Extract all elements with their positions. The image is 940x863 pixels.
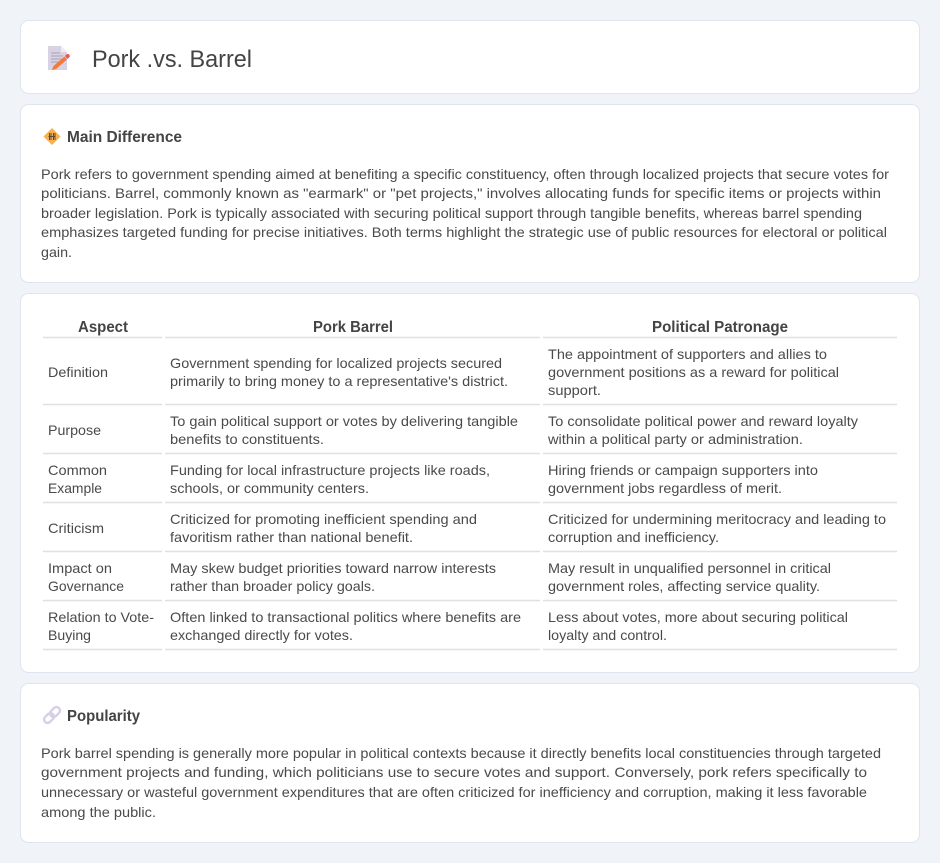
table row: definition: The appointment of supporters and allies to bbox=[548, 346, 827, 362]
table row: common example: Hiring friends or campaign supporters into bbox=[548, 462, 818, 478]
table row: criticism bbox=[48, 511, 886, 545]
text block: main difference bbox=[41, 166, 889, 260]
table row: purpose bbox=[48, 413, 858, 447]
table row: common example bbox=[48, 462, 818, 496]
table row: relation to vote-buying: Buying bbox=[48, 627, 91, 643]
table row: definition: primarily to bring money to a representative's district. bbox=[170, 373, 508, 389]
table row: purpose: Purpose bbox=[48, 422, 101, 438]
text block: popularity: unnecessary or wasteful government expenditures that are often criticized for inefficiency and corruption, making it less favorable bbox=[41, 784, 867, 800]
text block: popularity: Pork barrel spending is generally more popular in political contexts because it directly benefits local constituencies through targeted bbox=[41, 745, 881, 761]
table header row bbox=[78, 319, 788, 336]
heading: main difference: Main Difference bbox=[67, 129, 182, 146]
table row: definition: support. bbox=[548, 382, 601, 398]
heading: popularity: Popularity bbox=[67, 708, 140, 725]
table row: common example: Funding for local infrastructure projects like roads, bbox=[170, 462, 490, 478]
panel: main difference bbox=[20, 104, 920, 282]
table row: criticism: Criticized for promoting inefficient spending and bbox=[170, 511, 477, 527]
table row: definition: Definition bbox=[48, 364, 108, 380]
table row: relation to vote-buying: Often linked to transactional politics where benefits are bbox=[170, 609, 521, 625]
table row: common example: Example bbox=[48, 480, 102, 496]
table row: purpose: benefits to constituents. bbox=[170, 431, 324, 447]
table header row: Pork Barrel bbox=[313, 319, 393, 336]
title: Pork .vs. Barrel bbox=[92, 46, 252, 73]
text block: main difference: emphasizes targeted funding for precise initiatives. Both terms highlight the strategic use of public resources for electoral or political bbox=[41, 224, 887, 240]
table row: relation to vote-buying: Relation to Vote- bbox=[48, 609, 154, 625]
table row: criticism: corruption and inefficiency. bbox=[548, 529, 719, 545]
table row: relation to vote-buying: Less about votes, more about securing political bbox=[548, 609, 848, 625]
table row: impact on governance: May result in unqualified personnel in critical bbox=[548, 560, 831, 576]
table row: impact on governance: government roles, affecting service quality. bbox=[548, 578, 820, 594]
table row: common example: government jobs regardless of merit. bbox=[548, 480, 782, 496]
table row: relation to vote-buying: exchanged directly for votes. bbox=[170, 627, 353, 643]
panel: popularity bbox=[20, 684, 920, 842]
text block: popularity: among the public. bbox=[41, 804, 156, 820]
table row: criticism: Criticism bbox=[48, 520, 104, 536]
table row: common example: schools, or community centers. bbox=[170, 480, 369, 496]
table row: definition: government positions as a reward for political bbox=[548, 364, 839, 380]
text block: main difference: gain. bbox=[41, 244, 72, 260]
table row: impact on governance: Governance bbox=[48, 578, 124, 594]
table row: criticism: favoritism rather than national benefit. bbox=[170, 529, 413, 545]
table row: common example: Common bbox=[48, 462, 107, 478]
table row: purpose: within a political party or administration. bbox=[547, 431, 803, 447]
table row: relation to vote-buying bbox=[48, 609, 848, 643]
text block: main difference: Pork refers to government spending aimed at benefiting a specific constituency, often through localized projects that secure votes for bbox=[41, 166, 889, 182]
icon: chain link bbox=[43, 706, 61, 724]
text block: main difference: broader legislation. Pork is typically associated with securing political support through tangible benefits, whereas barrel spending bbox=[41, 205, 862, 221]
text block: popularity bbox=[41, 745, 881, 820]
panel: title header bbox=[20, 20, 920, 94]
text block: popularity: government projects and funding, which politicians use to secure votes and support. Conversely, pork refers specifically to bbox=[41, 764, 867, 780]
table header row: Aspect bbox=[78, 319, 129, 336]
icon: orange diamond bbox=[44, 128, 60, 145]
table row: definition: Government spending for localized projects secured bbox=[170, 355, 502, 371]
table row: purpose: To gain political support or votes by delivering tangible bbox=[170, 413, 518, 429]
icon: document with pencil bbox=[48, 46, 70, 70]
table row: definition bbox=[48, 346, 839, 398]
table row: impact on governance bbox=[48, 560, 831, 594]
table row: relation to vote-buying: loyalty and control. bbox=[548, 627, 667, 643]
table row: purpose: To consolidate political power and reward loyalty bbox=[548, 413, 858, 429]
table header row: Political Patronage bbox=[652, 319, 788, 336]
table row: impact on governance: Impact on bbox=[48, 560, 112, 576]
table row: impact on governance: May skew budget priorities toward narrow interests bbox=[170, 560, 496, 576]
table row: impact on governance: rather than broader policy goals. bbox=[170, 578, 375, 594]
table row: criticism: Criticized for undermining meritocracy and leading to bbox=[548, 511, 886, 527]
text block: main difference: politicians. Barrel, commonly known as "earmark" or "pet projects," involves allocating funds for specific items or projects within bbox=[41, 185, 881, 201]
panel: comparison table bbox=[20, 294, 920, 672]
